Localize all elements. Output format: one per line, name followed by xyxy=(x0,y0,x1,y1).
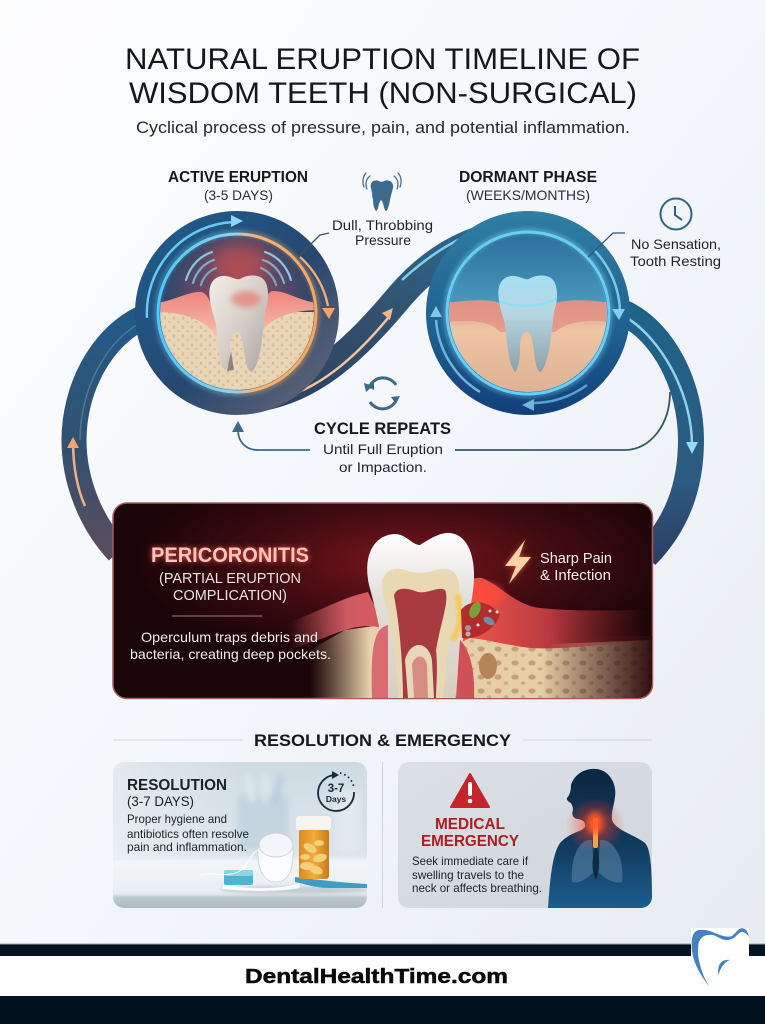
silhouette with inflamed throat xyxy=(548,769,652,908)
heading: active eruption xyxy=(168,169,308,203)
icon: 3-7 days timer: Days xyxy=(326,794,346,804)
icon: clock xyxy=(660,198,692,230)
pill bottle xyxy=(296,816,331,879)
panel subheading: COMPLICATION) xyxy=(173,587,287,604)
dormant tooth scene xyxy=(449,236,607,392)
callout: no sensation tooth resting: Tooth Resting xyxy=(630,253,721,269)
panel subheading: (PARTIAL ERUPTION xyxy=(159,570,301,587)
card text: Proper hygiene and xyxy=(127,812,227,826)
dormant tooth xyxy=(498,275,557,372)
card text: RESOLUTION xyxy=(127,777,227,794)
glowing ring xyxy=(158,234,316,392)
band: middle connector xyxy=(235,232,530,410)
sharp pain label xyxy=(540,551,612,584)
bacteria pocket xyxy=(461,600,500,638)
floss container xyxy=(200,833,293,882)
title: WISDOM TEETH (NON-SURGICAL) xyxy=(129,77,637,110)
subtitle: Cyclical process of pressure, pain, and potential inflammation. xyxy=(136,118,630,137)
arrow: line from dormant phase xyxy=(455,392,670,450)
callout: no sensation tooth resting: No Sensation, xyxy=(631,236,721,252)
circle: dormant phase xyxy=(426,211,630,415)
molar cross-section xyxy=(367,533,474,698)
sharp pain label: Sharp Pain xyxy=(540,551,612,567)
band: right return path xyxy=(624,313,698,556)
heading: active eruption: (3-5 DAYS) xyxy=(204,187,273,203)
active tooth xyxy=(209,275,268,372)
footer xyxy=(0,928,765,1024)
sharp pain label: & Infection xyxy=(540,568,611,584)
icon: repeat arrows xyxy=(364,378,400,409)
dormant entry arrow on connector xyxy=(402,215,534,280)
leader line xyxy=(298,233,329,257)
section heading: RESOLUTION & EMERGENCY xyxy=(254,731,512,750)
active tooth scene xyxy=(160,236,314,390)
icon: lightning bolt xyxy=(505,540,531,584)
callout: dull throbbing pressure: Pressure xyxy=(355,232,411,248)
leader line xyxy=(588,233,625,257)
band: left return path xyxy=(67,318,142,552)
panel: pericoronitis xyxy=(113,503,652,698)
card: resolution xyxy=(113,762,370,908)
card text: swelling travels to the xyxy=(412,868,524,882)
toothbrush xyxy=(220,870,370,894)
circular arrows xyxy=(430,250,625,411)
bone xyxy=(310,625,652,698)
panel subheading xyxy=(159,570,301,604)
card text: (3-7 DAYS) xyxy=(127,793,194,809)
callout: no sensation tooth resting xyxy=(588,198,721,269)
callout: dull throbbing pressure xyxy=(298,173,433,257)
pressure waves xyxy=(186,252,291,285)
heading: active eruption: ACTIVE ERUPTION xyxy=(168,169,308,186)
panel illustration xyxy=(290,533,652,698)
card heading xyxy=(421,816,519,850)
gums xyxy=(290,578,652,650)
arrow: cycle back to active eruption xyxy=(232,421,310,450)
cycle repeats label: CYCLE REPEATS xyxy=(314,420,451,438)
circle: active eruption xyxy=(135,211,339,415)
title: NATURAL ERUPTION TIMELINE OF xyxy=(125,43,640,76)
card: medical emergency xyxy=(398,762,652,908)
footer website: DentalHealthTime.com xyxy=(245,966,508,988)
icon: throbbing tooth xyxy=(363,173,401,211)
card heading: EMERGENCY xyxy=(421,833,519,850)
icon: warning triangle xyxy=(451,774,489,807)
panel heading: PERICORONITIS xyxy=(151,544,309,567)
cycle repeats label: Until Full Eruption xyxy=(323,441,443,457)
heading: dormant phase: (WEEKS/MONTHS) xyxy=(466,187,590,203)
panel description: Operculum traps debris and xyxy=(141,629,318,645)
card text xyxy=(127,777,249,854)
icon: 3-7 days timer: 3-7 xyxy=(328,783,344,795)
card text: Seek immediate care if xyxy=(412,854,529,868)
logo: tooth xyxy=(691,928,749,987)
title xyxy=(125,43,640,110)
callout: dull throbbing pressure: Dull, Throbbing xyxy=(332,217,433,233)
card text: pain and inflammation. xyxy=(127,840,247,854)
card heading: MEDICAL xyxy=(435,816,505,833)
icon: 3-7 days timer xyxy=(318,771,354,811)
circular arrows xyxy=(147,215,335,319)
cycle repeats label xyxy=(314,378,451,475)
cycle loop bands xyxy=(67,232,698,556)
heading: dormant phase xyxy=(459,169,597,203)
bathroom illustration xyxy=(113,762,370,894)
heading: dormant phase: DORMANT PHASE xyxy=(459,169,597,186)
glowing ring xyxy=(447,232,609,394)
panel description: bacteria, creating deep pockets. xyxy=(130,646,331,662)
cycle repeats label: or Impaction. xyxy=(339,459,427,475)
card text: neck or affects breathing. xyxy=(412,881,542,895)
panel description xyxy=(130,629,331,662)
card text: antibiotics often resolve xyxy=(127,827,249,841)
card text xyxy=(412,854,542,895)
